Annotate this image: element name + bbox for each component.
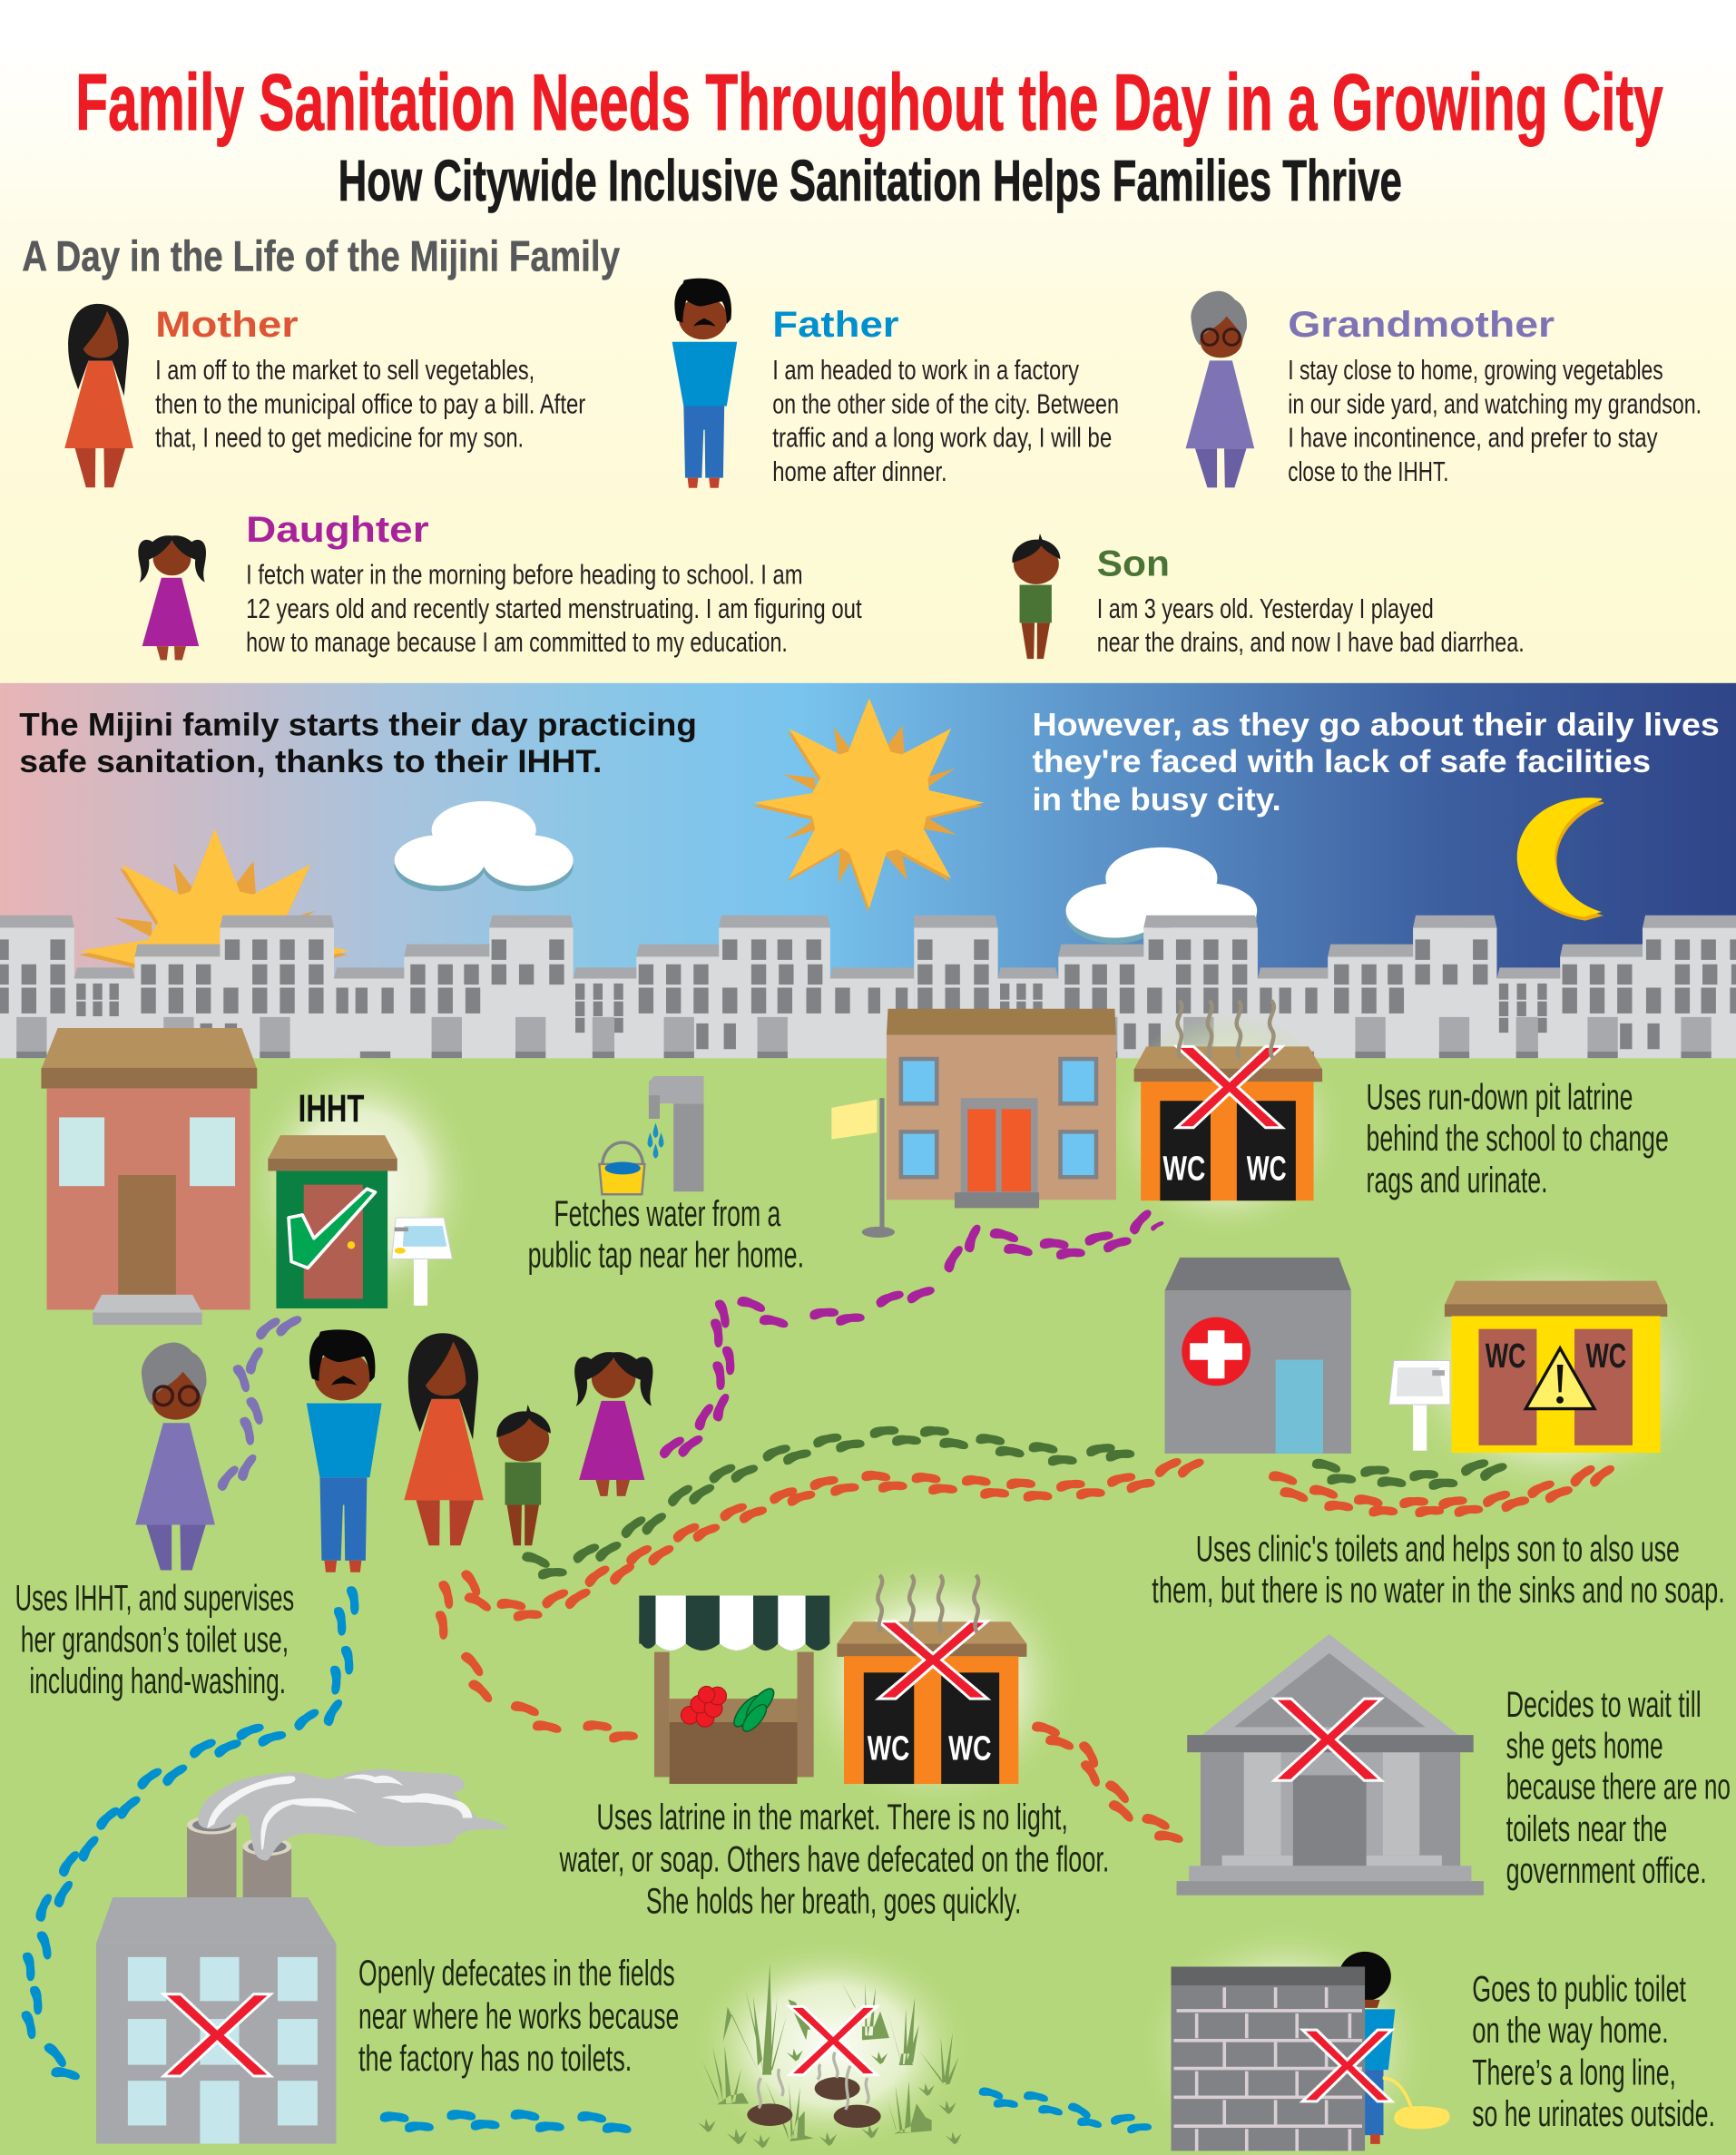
text: mother bio: then to the municipal office to pay a bill. After xyxy=(155,390,585,420)
building: school with flag xyxy=(831,1009,1116,1238)
portrait: father xyxy=(672,279,737,488)
icon: clinic toilets with warning xyxy=(1445,1281,1667,1453)
footprints: mother xyxy=(435,1455,1617,1845)
icon: public tap and bucket xyxy=(599,1076,703,1194)
icon: clinic toilets with warning: WC xyxy=(1486,1337,1525,1376)
footprints: daughter xyxy=(657,1207,1165,1460)
icon: market latrine: WC xyxy=(868,1730,909,1768)
icon: market stall xyxy=(639,1596,829,1784)
text: daughter bio xyxy=(246,561,862,658)
text: daytime note: they're faced with lack of safe facilities xyxy=(1033,744,1651,779)
icon: warning triangle xyxy=(1525,1348,1594,1409)
panel: sky band xyxy=(0,683,1736,1061)
text: morning note: The Mijini family starts their day practicing xyxy=(19,707,697,742)
building: family home xyxy=(41,1028,257,1325)
building: government office xyxy=(1177,1634,1484,1895)
portrait: son xyxy=(1012,534,1060,659)
figure: grandmother xyxy=(135,1343,215,1571)
text: father bio: home after dinner. xyxy=(772,457,947,487)
icon: red X xyxy=(1177,1046,1282,1128)
caption: open defecation: near where he works because xyxy=(358,1997,679,2037)
icon: red X xyxy=(1274,1699,1381,1780)
text: father bio xyxy=(772,356,1119,487)
caption: grandmother at IHHT: her grandson’s toilet use, xyxy=(21,1621,289,1660)
caption: market latrine xyxy=(559,1797,1109,1921)
name: father: Father xyxy=(772,305,899,345)
city skyline xyxy=(0,916,1736,1060)
panel: daughter profile xyxy=(138,510,862,661)
icon: cloud right xyxy=(1066,847,1257,944)
text: mother bio: that, I need to get medicine for my son. xyxy=(155,423,524,453)
text: daughter bio: how to manage because I am committed to my education. xyxy=(246,628,788,658)
text: mother bio: I am off to the market to sell vegetables, xyxy=(155,356,535,386)
caption: open defecation: the factory has no toilets. xyxy=(358,2039,632,2079)
text: son bio: I am 3 years old. Yesterday I played xyxy=(1097,594,1434,624)
panel: mother profile xyxy=(64,304,585,487)
name: son: Son xyxy=(1097,544,1170,584)
text: morning note: safe sanitation, thanks to their IHHT. xyxy=(19,744,602,779)
caption: fetches water: public tap near her home. xyxy=(528,1236,804,1276)
chimneys xyxy=(187,1816,291,1898)
icon: school pit latrine: WC xyxy=(1162,1150,1205,1188)
text: daytime note: in the busy city. xyxy=(1033,782,1281,818)
icon: odor lines xyxy=(1178,1001,1274,1058)
panel: father profile xyxy=(672,279,1119,488)
section heading: A Day in the Life of the Mijini Family xyxy=(22,231,620,279)
icon: man urinating behind wall xyxy=(1171,1952,1450,2150)
caption: clinic toilets xyxy=(1152,1530,1725,1611)
caption: grandmother at IHHT xyxy=(15,1578,294,1701)
caption: pit latrine xyxy=(1367,1077,1669,1200)
portrait: mother xyxy=(64,304,133,487)
icon: open field with grass and waste xyxy=(698,1963,962,2148)
icon: midday sun xyxy=(752,698,984,912)
icon: cloud left xyxy=(395,801,574,891)
portrait: grandmother xyxy=(1186,291,1254,487)
caption: market latrine: water, or soap. Others have defecated on the floor. xyxy=(559,1840,1109,1880)
text: daughter bio: 12 years old and recently started menstruating. I am figuring out xyxy=(246,594,862,624)
text: mother bio xyxy=(155,356,585,453)
building: factory xyxy=(96,1769,508,2144)
text: father bio: I am headed to work in a factory xyxy=(772,356,1080,386)
text: father bio: traffic and a long work day, I will be xyxy=(772,423,1112,453)
figure: father xyxy=(307,1329,382,1572)
icon: red X xyxy=(878,1621,987,1699)
footprints: father xyxy=(21,1585,1152,2135)
glow halos xyxy=(242,1014,1711,2155)
name: grandmother: Grandmother xyxy=(1288,305,1555,345)
portrait: daughter xyxy=(138,535,206,661)
caption: fetches water xyxy=(528,1194,804,1276)
text: daytime note: However, as they go about their daily lives xyxy=(1033,707,1720,742)
caption: market latrine: Uses latrine in the market. There is no light, xyxy=(596,1797,1068,1837)
caption: grandmother at IHHT: including hand-washing. xyxy=(29,1661,286,1701)
panel: ground xyxy=(0,1058,1736,2155)
panel: grandmother profile xyxy=(1186,291,1702,487)
text: father bio: on the other side of the city. Between xyxy=(772,390,1119,420)
icon: school pit latrine: WC xyxy=(1247,1150,1287,1188)
caption: fetches water: Fetches water from a xyxy=(554,1194,780,1234)
family group xyxy=(135,1329,652,1572)
caption: grandmother at IHHT: Uses IHHT, and supervises xyxy=(15,1578,294,1618)
caption: government office xyxy=(1506,1685,1731,1891)
brick wall xyxy=(1171,1966,1365,2150)
name: mother: Mother xyxy=(155,305,299,345)
figure: mother xyxy=(404,1333,484,1545)
icon: crescent moon xyxy=(1517,798,1604,921)
text: morning note xyxy=(19,707,697,779)
footprints: son xyxy=(521,1425,1509,1580)
icon: market latrine: WC xyxy=(948,1730,992,1768)
text: grandmother bio: close to the IHHT. xyxy=(1288,457,1448,487)
icon: cucumbers xyxy=(730,1685,779,1735)
icon: safe household toilet xyxy=(268,1135,397,1308)
icon: check mark xyxy=(289,1189,375,1268)
text: son bio: near the drains, and now I have bad diarrhea. xyxy=(1097,628,1525,658)
icon: clinic toilets with warning: WC xyxy=(1585,1337,1626,1376)
caption: government office: toilets near the xyxy=(1506,1809,1667,1849)
icon: market latrine xyxy=(837,1575,1026,1784)
label: IHHT: IHHT xyxy=(299,1087,364,1130)
caption: open defecation xyxy=(358,1954,679,2079)
building: clinic xyxy=(1165,1258,1351,1454)
figure: son xyxy=(496,1405,551,1545)
caption: government office: she gets home xyxy=(1506,1726,1663,1766)
caption: market latrine: She holds her breath, goes quickly. xyxy=(646,1881,1021,1921)
icon: red X xyxy=(1302,2030,1392,2101)
text: son bio xyxy=(1097,594,1525,658)
icon: rising sun xyxy=(79,829,349,1078)
footprints: grandmother xyxy=(215,1313,304,1493)
icon: red X xyxy=(790,2006,877,2075)
icon: red X xyxy=(163,1994,270,2076)
icon: tomatoes xyxy=(682,1686,726,1727)
name: daughter: Daughter xyxy=(246,510,429,550)
icon: school pit latrine xyxy=(1134,1001,1322,1200)
text: daytime note xyxy=(1033,707,1720,818)
icon: sink with water xyxy=(392,1218,452,1306)
icon: odor lines xyxy=(878,1575,978,1632)
figure: daughter xyxy=(574,1352,652,1496)
text: grandmother bio xyxy=(1288,356,1702,487)
smoke cloud xyxy=(198,1769,508,1860)
text: daughter bio: I fetch water in the morning before heading to school. I am xyxy=(246,561,803,591)
caption: open defecation: Openly defecates in the fields xyxy=(358,1954,675,1993)
caption: pit latrine: rags and urinate. xyxy=(1367,1161,1547,1200)
caption: public toilet xyxy=(1472,1969,1715,2134)
icon: clinic sink with no water xyxy=(1389,1361,1450,1451)
page background xyxy=(0,0,1736,683)
panel: son profile xyxy=(1012,534,1525,659)
